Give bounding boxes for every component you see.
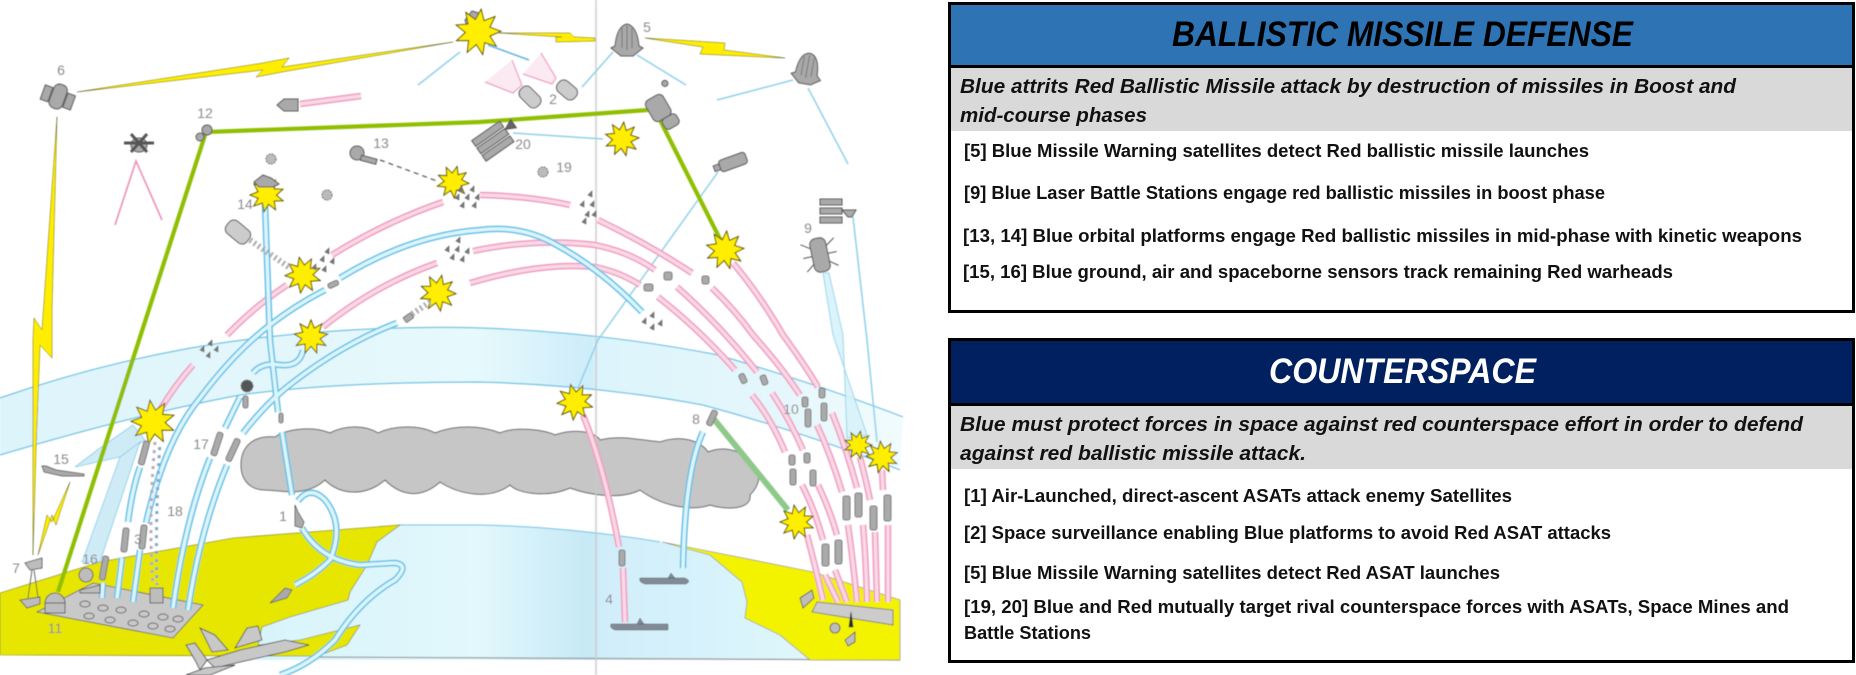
diagram number labels: 4	[605, 591, 613, 607]
list of effects: [2] Space surveillance enabling Blue platforms to avoid Red ASAT attacks	[964, 523, 1611, 543]
orbital mines	[241, 154, 548, 392]
dotted kinetic beams	[151, 160, 437, 585]
explosions	[129, 6, 899, 541]
diagram number labels: 8	[692, 411, 700, 427]
green beam 8	[713, 418, 788, 510]
thin sensor lines	[418, 45, 877, 442]
heading: COUNTERSPACE	[1269, 352, 1538, 391]
left land	[0, 525, 400, 656]
satellites	[39, 24, 856, 275]
diagram number labels: 7	[12, 560, 20, 576]
ground line	[313, 657, 900, 660]
gutter	[595, 0, 597, 675]
panel header bar	[951, 341, 1852, 403]
diagram number labels: 9	[804, 220, 812, 236]
header divider	[951, 403, 1852, 406]
pink surveillance cones	[485, 53, 556, 93]
diagram number labels: 19	[556, 159, 572, 175]
list of effects: [15, 16] Blue ground, air and spaceborne sensors track remaining Red warheads	[963, 262, 1673, 282]
panel: counterspace	[950, 340, 1854, 662]
diagram number labels: 5	[643, 19, 651, 35]
list of effects: [5] Blue Missile Warning satellites detect Red ballistic missile launches	[964, 141, 1589, 161]
list of effects: [9] Blue Laser Battle Stations engage red ballistic missiles in boost phase	[964, 183, 1605, 203]
diagram number labels: 16	[82, 551, 98, 567]
illustration: missile defense battlefield	[0, 0, 903, 675]
list of effects: [5] Blue Missile Warning satellites detect Red ASAT launches	[964, 563, 1500, 583]
sensor beams	[75, 273, 867, 562]
diagram number labels: 15	[53, 451, 69, 467]
diagram number labels: 10	[783, 401, 799, 417]
summary text	[960, 413, 1803, 465]
diagram number labels: 6	[57, 62, 65, 78]
summary band	[951, 406, 1852, 469]
green relay link	[58, 110, 722, 592]
ground sensors	[20, 558, 855, 646]
list of effects: [19, 20] Blue and Red mutually target rival counterspace forces with ASATs, Space Mines and	[964, 597, 1789, 617]
list of effects	[964, 486, 1789, 643]
list of effects: [13, 14] Blue orbital platforms engage Red ballistic missiles in mid-phase with kinetic weapons	[963, 226, 1802, 246]
right land	[662, 542, 900, 660]
diagram number labels: 14	[237, 196, 253, 212]
atmosphere boundary lines	[0, 327, 903, 470]
panel header bar	[951, 5, 1852, 66]
small aircraft	[42, 466, 304, 603]
diagram number labels: 17	[193, 436, 209, 452]
lightning bolts	[33, 33, 785, 555]
jet fighter	[186, 626, 309, 675]
submarines	[610, 573, 689, 630]
diagram number labels: 18	[167, 503, 183, 519]
diagram number labels: 3	[134, 531, 142, 547]
sea	[255, 525, 815, 660]
diagram number labels: 1	[279, 508, 287, 524]
summary text: Blue attrits Red Ballistic Missile attack by destruction of missiles in Boost and	[960, 75, 1736, 98]
sea horizon line	[400, 525, 660, 542]
panel frame	[950, 340, 1854, 662]
heading: BALLISTIC MISSILE DEFENSE	[1172, 15, 1634, 54]
satellite behind top explosion	[465, 11, 482, 30]
panel: ballistic missile defense	[950, 4, 1854, 312]
diagram number labels: 2	[549, 91, 557, 107]
diagram number labels: 11	[48, 620, 62, 636]
header divider	[951, 65, 1852, 68]
blue interceptor tracks	[102, 205, 703, 675]
summary text: Blue must protect forces in space against red counterspace effort in order to defend	[960, 413, 1803, 436]
pink sensor V	[115, 161, 162, 225]
summary text	[960, 75, 1736, 127]
diagram number labels: 12	[197, 105, 213, 121]
summary text: against red ballistic missile attack.	[960, 442, 1306, 465]
diagram number labels	[12, 19, 812, 636]
warhead clusters	[200, 186, 662, 358]
diagram number labels: 20	[515, 136, 531, 152]
atmosphere band	[0, 327, 903, 470]
cloud	[241, 427, 759, 508]
left launch plate	[37, 583, 203, 638]
right launch plate	[812, 602, 893, 625]
pink missile tracks	[160, 96, 888, 622]
summary band	[951, 68, 1852, 131]
list of effects: [1] Air-Launched, direct-ascent ASATs attack enemy Satellites	[964, 486, 1512, 506]
list of effects: Battle Stations	[964, 623, 1091, 643]
summary text: mid-course phases	[960, 104, 1147, 127]
panel frame	[950, 4, 1854, 312]
rockets in flight	[99, 272, 891, 580]
diagram number labels: 13	[373, 135, 389, 151]
list of effects	[963, 141, 1802, 282]
